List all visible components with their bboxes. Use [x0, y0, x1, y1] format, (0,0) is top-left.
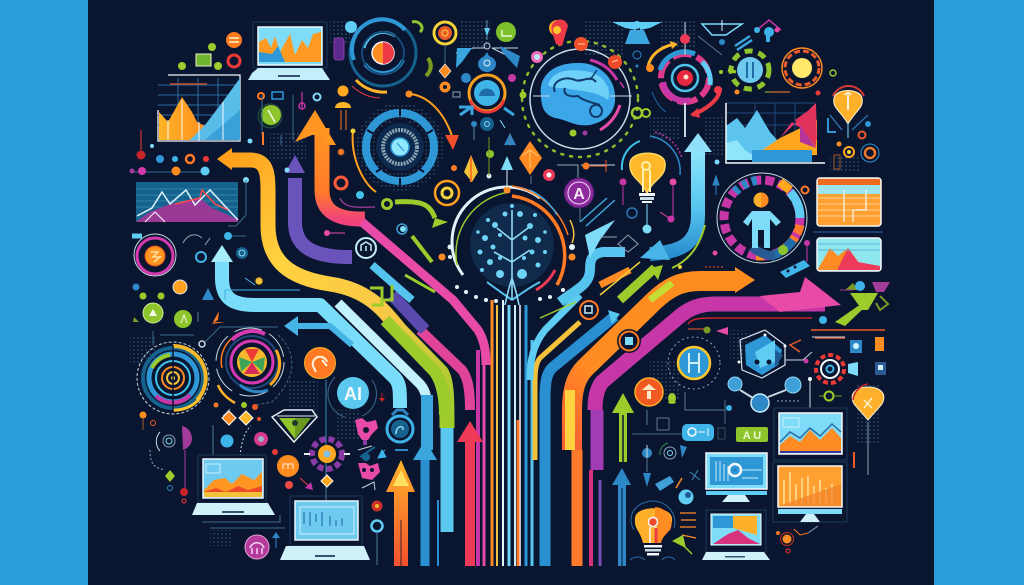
right blue side band — [934, 0, 1024, 585]
left streams of arrows — [211, 100, 486, 566]
icon: bottom light bulb — [630, 501, 696, 560]
molecule — [728, 377, 742, 391]
icon: brain with circle — [509, 19, 642, 157]
monitor: lower right — [773, 462, 847, 522]
tree canopy — [470, 203, 554, 287]
node dots — [448, 244, 575, 303]
pill labels — [632, 400, 768, 442]
left blue side band — [0, 0, 88, 585]
stream: magenta right — [595, 304, 825, 410]
arrows: lime and blue up — [612, 393, 634, 566]
stream: yellow to lime — [230, 160, 447, 428]
laptop: top left chart — [248, 22, 330, 80]
icon: colored circular emblem — [199, 327, 292, 425]
icon: green gear lens — [719, 20, 782, 94]
central vertical lines trunk — [478, 282, 540, 566]
stream: lime inner — [385, 320, 445, 415]
arrowhead: magenta right — [760, 277, 841, 312]
ring arcs — [452, 187, 540, 275]
icon: orange diamond — [510, 133, 542, 184]
AI badge: AI — [344, 384, 362, 404]
laptop: lower left — [192, 455, 285, 559]
small cluster: center lower right — [642, 443, 700, 504]
right streams of arrows — [530, 133, 841, 566]
icon: purple gear — [213, 425, 350, 490]
small orange cluster: lower right — [776, 526, 818, 553]
icon set: left mid circles — [130, 95, 293, 226]
stream: magenta — [362, 222, 486, 365]
icon: orange bulb right — [852, 384, 884, 475]
dotted texture blocks — [130, 20, 881, 546]
stream: orange up arrow — [322, 128, 365, 219]
icon: person — [335, 86, 351, 130]
icon: green gem — [272, 410, 317, 442]
laptop: bottom right — [702, 510, 770, 560]
arrowhead: purple — [285, 155, 305, 173]
tree brain circle — [438, 186, 576, 305]
monitor: center — [706, 453, 767, 502]
node circles on right streams — [540, 301, 641, 353]
icon: orange tree badge — [635, 378, 732, 425]
stream: light blue inner — [530, 295, 580, 380]
arrow: curved orange to red — [406, 90, 459, 150]
stream: orange to yellow — [572, 281, 735, 450]
area chart: top right — [725, 103, 825, 163]
arrowhead: light blue — [211, 245, 233, 262]
lime glyph block — [370, 285, 392, 305]
stream: light blue — [222, 262, 400, 408]
icon: person wheel — [678, 173, 810, 278]
monitor: upper right — [774, 408, 847, 460]
mid left path nodes — [284, 128, 513, 236]
diamond outline node and sticks — [570, 198, 638, 252]
lime arrows — [620, 268, 655, 300]
big blue up arrow — [650, 150, 698, 254]
icon: orange bulb top right — [714, 86, 879, 169]
person figure — [754, 192, 768, 208]
brain blob — [541, 63, 615, 125]
arrow: red — [457, 421, 483, 566]
arrowhead: orange right — [735, 267, 755, 293]
arrowhead: orange — [295, 110, 336, 145]
icon: purple A badge: A — [573, 186, 585, 203]
pink puzzle icons and blue ornament — [355, 393, 413, 565]
left lower cluster: badge and small icons — [132, 232, 300, 345]
stream: blue right — [545, 316, 615, 566]
icon: concentric data dial — [137, 342, 209, 503]
laptop: lower center — [280, 490, 370, 560]
pill labels: A U — [743, 430, 761, 442]
panel chart: orange bars — [817, 178, 881, 226]
icon: red gear with arrows — [790, 330, 886, 410]
icon cluster: top left dots — [178, 32, 320, 109]
icon: large blue target — [356, 103, 444, 191]
line area chart: top left — [158, 75, 240, 141]
icon: H badge — [668, 281, 890, 389]
panel chart: mountain — [813, 232, 883, 271]
icon: small house node — [356, 226, 406, 258]
icon: blue lens with ring — [459, 73, 518, 145]
icon: wing emblem — [612, 20, 752, 50]
stream: purple — [295, 178, 352, 257]
icon: sun gear — [770, 48, 836, 96]
stream: blue diagonal — [372, 265, 412, 300]
brain accents — [590, 60, 617, 80]
tree trunk — [494, 210, 530, 305]
icon: top center branches — [434, 20, 520, 97]
stream: yellow thin — [535, 322, 580, 460]
arrowhead: yellow — [217, 148, 232, 170]
icon: orange swirl badge — [304, 348, 336, 490]
icon: lime ball — [258, 104, 282, 128]
line chart panel: left — [136, 182, 238, 222]
icon: purple A badge — [564, 178, 594, 222]
icon: glowing bulb center — [543, 132, 682, 234]
stream: lime small — [395, 202, 435, 218]
arrow: big orange up — [386, 460, 415, 566]
icon: top ring with orange core — [334, 19, 431, 98]
icon: polygon and molecule — [728, 330, 812, 412]
icon: multicolor ring — [642, 22, 722, 137]
AI badge — [328, 377, 376, 417]
